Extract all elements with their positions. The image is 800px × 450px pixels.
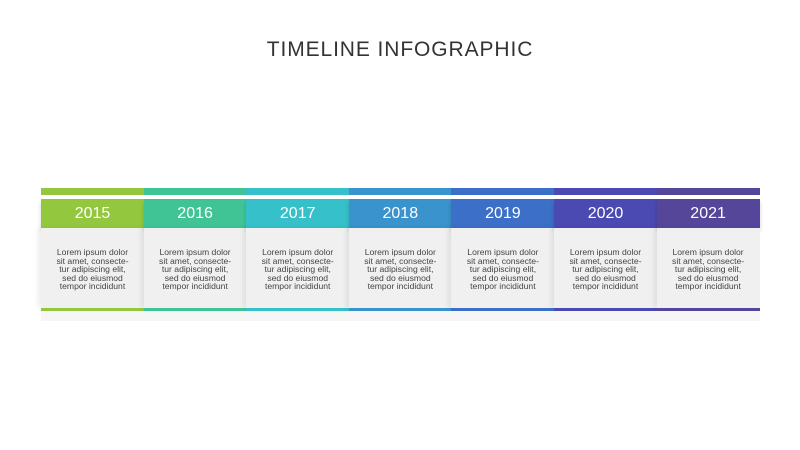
title: TIMELINE INFOGRAPHIC [267,38,533,61]
column 2015 [38,188,144,321]
column 2015: sed do eiusmod [62,273,123,283]
column 2020: Lorem ipsum dolor [570,247,641,257]
column 2019: 2019 [485,205,521,222]
column 2021: Lorem ipsum dolor [672,247,744,257]
column 2021: tempor incididunt [675,281,741,291]
column 2019 [448,188,554,321]
column 2021: tur adipiscing elit, [675,264,741,274]
column 2019: sed do eiusmod [473,273,533,283]
column 2021: 2021 [690,205,726,222]
column 2018: 2018 [382,205,418,222]
column 2016: 2016 [177,205,213,222]
column 2017: sed do eiusmod [267,273,328,283]
column 2016 [141,188,246,321]
column 2019: sit amet, consecte- [467,256,539,266]
column 2020: tur adipiscing elit, [572,264,639,274]
column 2021: sed do eiusmod [678,273,738,283]
column 2020 [551,188,657,321]
column 2016: Lorem ipsum dolor [160,247,231,257]
column 2019: tur adipiscing elit, [470,264,536,274]
column 2016: tempor incididunt [162,281,228,291]
column 2016: tur adipiscing elit, [162,264,228,274]
column 2020: 2020 [588,205,623,222]
column 2015: 2015 [75,205,110,222]
column 2017: 2017 [280,205,315,222]
column 2020: sed do eiusmod [575,273,636,283]
column 2018: tempor incididunt [368,281,433,291]
column 2017: tur adipiscing elit, [264,264,331,274]
column 2021 [654,188,762,321]
column 2018: sed do eiusmod [370,273,431,283]
column 2017: sit amet, consecte- [262,256,334,266]
column 2017: Lorem ipsum dolor [262,247,333,257]
column 2018: Lorem ipsum dolor [365,247,436,257]
timeline [38,188,762,321]
column 2020: sit amet, consecte- [569,256,642,266]
column 2018: tur adipiscing elit, [367,264,434,274]
column 2018 [346,188,451,321]
column 2015: Lorem ipsum dolor [57,247,128,257]
column 2015: tur adipiscing elit, [59,264,126,274]
column 2019: tempor incididunt [470,281,536,291]
column 2020: tempor incididunt [573,281,638,291]
column 2015: sit amet, consecte- [56,256,129,266]
column 2016: sed do eiusmod [165,273,225,283]
column 2019: Lorem ipsum dolor [467,247,538,257]
column 2021: sit amet, consecte- [672,256,744,266]
column 2016: sit amet, consecte- [159,256,231,266]
column 2015: tempor incididunt [60,281,125,291]
column 2017: tempor incididunt [265,281,330,291]
column 2017 [243,188,349,321]
column 2018: sit amet, consecte- [364,256,436,266]
